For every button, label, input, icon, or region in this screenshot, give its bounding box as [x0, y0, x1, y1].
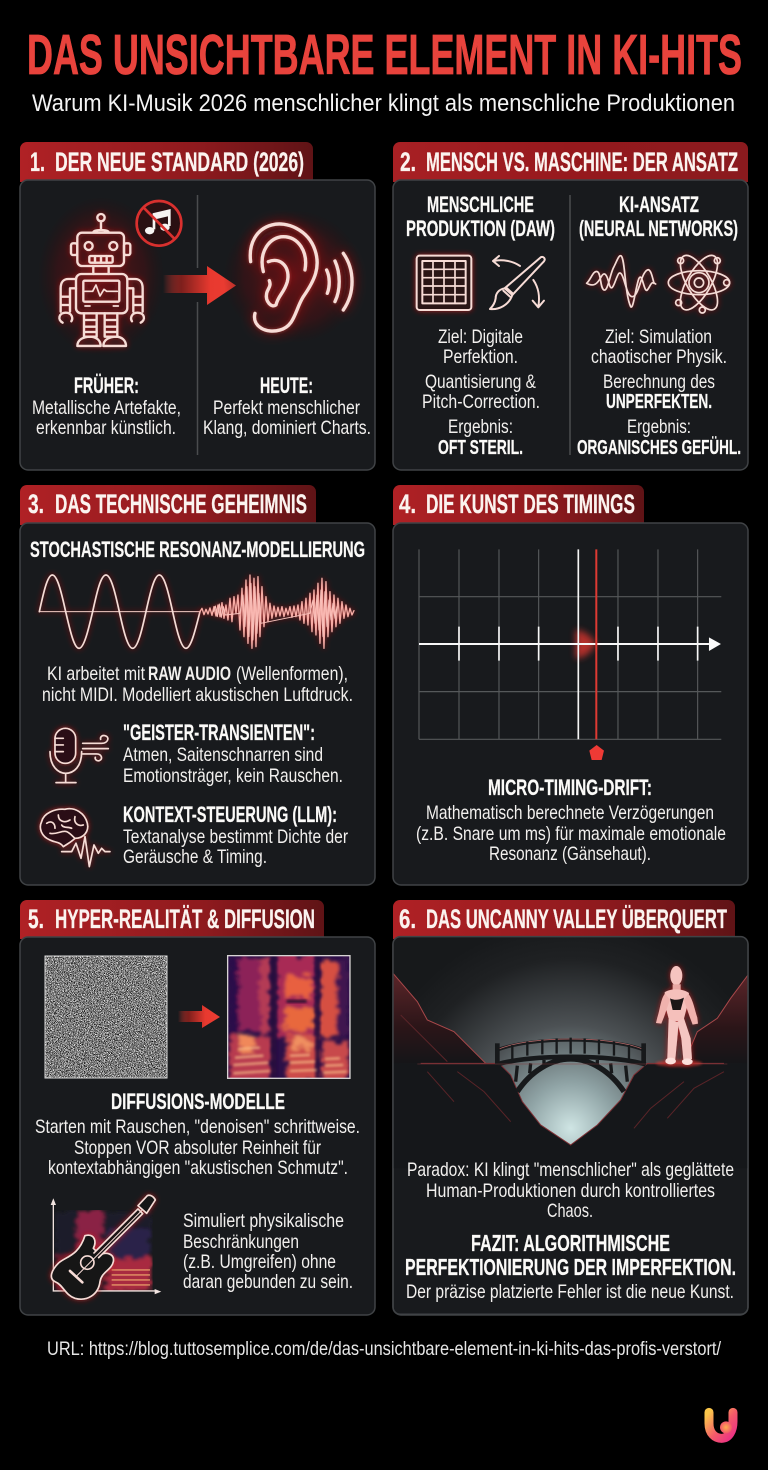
heading: ki-ansatz	[579, 192, 738, 241]
text: menschliche spalte: Perfektion.	[443, 346, 518, 368]
text: geister-transienten: Emotionsträger, kein Rauschen.	[123, 765, 343, 787]
icon: brush with arrows	[490, 256, 545, 309]
panel 4 heading: DIE KUNST DES TIMINGS	[426, 489, 635, 519]
icon: brain with pulse	[40, 809, 110, 867]
chart: micro-timing grid	[419, 549, 721, 760]
text: raw audio	[42, 663, 353, 706]
text: paradox	[407, 1159, 734, 1222]
text: menschliche spalte: Ziel: Digitale	[438, 326, 523, 348]
panel 5 heading: 5.	[28, 904, 44, 934]
icon: quantize grid	[417, 256, 471, 310]
text: diffusions-modelle: Starten mit Rauschen, "denoisen" schrittweise.	[35, 1116, 360, 1138]
text: menschliche spalte	[422, 326, 540, 459]
text: kontext-steuerung: Textanalyse bestimmt Dichte der	[123, 826, 348, 848]
icon: robot	[38, 197, 164, 357]
panel 2 heading	[393, 142, 748, 182]
text: fazit	[405, 1230, 736, 1303]
text: diffusions-modelle: kontextabhängigen "akustischen Schmutz".	[48, 1157, 348, 1179]
icon: guitar over spectrogram	[51, 1195, 161, 1299]
panel 1: der neue standard	[20, 142, 375, 470]
text: menschliche spalte: Ergebnis:	[448, 416, 513, 438]
text: micro-timing-drift: Resonanz (Gänsehaut).	[489, 843, 651, 865]
panel 1 heading: 1.	[30, 147, 45, 177]
arrow	[178, 1005, 220, 1028]
heading: menschliche produktion: PRODUKTION (DAW)	[406, 216, 555, 241]
text: paradox: Chaos.	[547, 1200, 593, 1222]
text: raw audio: nicht MIDI. Modelliert akustischen Luftdruck.	[42, 684, 353, 706]
icon: microphone with breath	[50, 728, 108, 783]
text: menschliche spalte: OFT STERIL.	[438, 437, 523, 459]
text: früher: Metallische Artefakte,	[32, 397, 181, 419]
text: micro-timing-drift	[416, 775, 726, 865]
text: raw audio: KI arbeitet mit	[47, 663, 145, 685]
panel 5 heading	[20, 900, 324, 939]
text: ki spalte: Berechnung des	[603, 371, 715, 393]
panel 3: das technische geheimnis	[20, 485, 375, 885]
icon: atom	[668, 250, 730, 315]
panel 1 heading	[20, 142, 313, 182]
heading: menschliche produktion: MENSCHLICHE	[427, 192, 534, 217]
text: raw audio: (Wellenformen),	[236, 663, 348, 685]
icon: waveform	[587, 256, 656, 307]
panel 2 heading: 2.	[400, 147, 416, 177]
chart: sine wave to noisy waveform	[39, 575, 354, 648]
text: physikalische beschränkungen: Beschränkungen	[183, 1231, 299, 1253]
illustration: bridge over the uncanny valley	[393, 937, 748, 1314]
text: kontext-steuerung	[123, 802, 348, 868]
text: diffusions-modelle: DIFFUSIONS-MODELLE	[111, 1089, 285, 1114]
text: physikalische beschränkungen: daran gebunden zu sein.	[183, 1271, 353, 1293]
text: physikalische beschränkungen: Simuliert physikalische	[183, 1210, 344, 1232]
text: heute: Perfekt menschlicher	[213, 397, 360, 419]
text: physikalische beschränkungen: (z.B. Umgreifen) ohne	[183, 1251, 336, 1273]
panel 1 heading: DER NEUE STANDARD (2026)	[55, 147, 304, 177]
panel 5: hyper-realität und diffusion	[20, 900, 375, 1315]
text: ki spalte	[577, 326, 741, 459]
panel 4 heading	[393, 485, 644, 525]
text: kontext-steuerung: Geräusche & Timing.	[123, 846, 267, 868]
panel 6 heading: 6.	[399, 904, 416, 934]
text: diffusions-modelle: Stoppen VOR absoluter Reinheit für	[74, 1137, 321, 1159]
text: ki spalte: chaotischer Physik.	[591, 346, 727, 368]
panel 6 heading	[393, 900, 735, 939]
panel 3 heading: DAS TECHNISCHE GEHEIMNIS	[55, 489, 307, 519]
text: heute	[203, 373, 371, 439]
text: menschliche spalte: Quantisierung &	[425, 371, 536, 393]
text: raw audio: RAW AUDIO	[148, 663, 231, 685]
heading: ki-ansatz: KI-ANSATZ	[619, 192, 699, 217]
noise image	[45, 956, 167, 1078]
arrow	[163, 266, 236, 305]
text: geister-transienten: "GEISTER-TRANSIENTEN":	[123, 720, 315, 745]
text: heute: HEUTE:	[260, 373, 313, 398]
text: menschliche spalte: Pitch-Correction.	[422, 391, 540, 413]
text: früher: FRÜHER:	[74, 373, 139, 398]
icon: no music	[137, 201, 181, 246]
text: heute: Klang, dominiert Charts.	[203, 417, 371, 439]
logo	[709, 1412, 733, 1438]
text: ki spalte: Ziel: Simulation	[605, 326, 712, 348]
text: früher: erkennbar künstlich.	[36, 417, 176, 439]
text: ki spalte: UNPERFEKTEN.	[606, 391, 712, 413]
text: ki spalte: Ergebnis:	[627, 416, 691, 438]
text: micro-timing-drift: MICRO-TIMING-DRIFT:	[488, 775, 652, 800]
figure: glowing android	[656, 966, 698, 1065]
text: geister-transienten	[123, 720, 343, 787]
panel 4 heading: 4.	[399, 489, 416, 519]
icon: ear with sound waves	[223, 210, 363, 343]
text: physikalische beschränkungen	[183, 1210, 353, 1293]
text: geister-transienten: Atmen, Saitenschnarren sind	[123, 744, 323, 766]
panel 3 heading: 3.	[28, 489, 44, 519]
heading: menschliche produktion	[406, 192, 555, 241]
text: diffusions-modelle	[35, 1089, 360, 1179]
spectrogram image	[228, 955, 350, 1082]
panel 4: die kunst des timings	[393, 485, 748, 885]
text: fazit: FAZIT: ALGORITHMISCHE	[471, 1230, 670, 1256]
panel 5 heading: HYPER-REALITÄT & DIFFUSION	[55, 904, 315, 934]
text: früher	[32, 373, 181, 439]
panel 3 heading	[20, 485, 316, 525]
subheading: stochastische resonanz-modellierung: STOCHASTISCHE RESONANZ-MODELLIERUNG	[30, 537, 365, 562]
panel 6: das uncanny valley überquert	[393, 900, 748, 1315]
panel 2: mensch vs maschine	[393, 142, 748, 470]
text: kontext-steuerung: KONTEXT-STEUERUNG (LLM):	[123, 802, 337, 827]
